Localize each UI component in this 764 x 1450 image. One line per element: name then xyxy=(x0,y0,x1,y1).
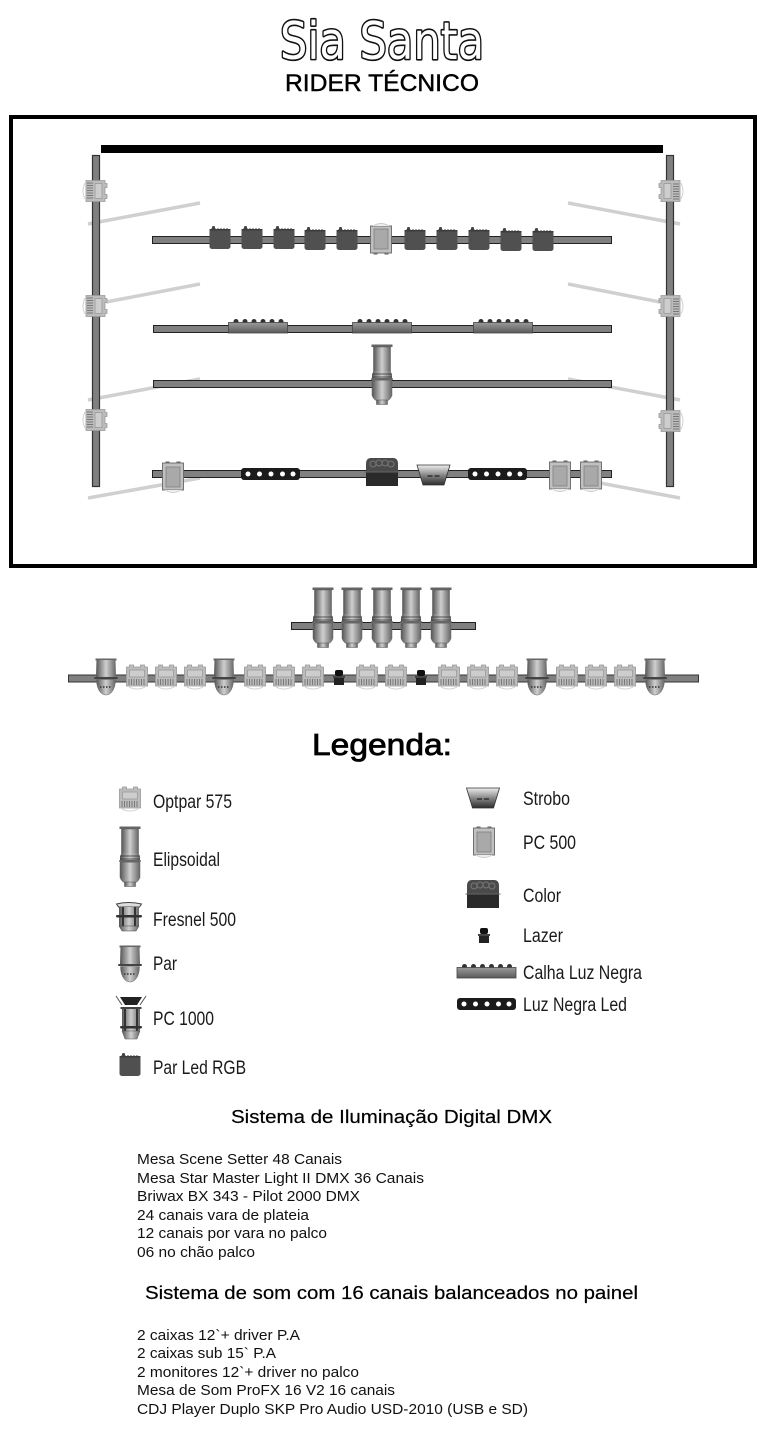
label: Luz Negra Led: Luz Negra Led xyxy=(523,995,627,1016)
label: Par: Par xyxy=(153,954,178,975)
legend heading: Legenda: xyxy=(312,727,452,762)
text block: sound equipment: 2 caixas sub 15` P.A xyxy=(137,1346,276,1362)
left side fixtures: Optpar xyxy=(83,180,107,430)
pipe 2 with Calha Luz Negra xyxy=(154,319,612,333)
text block: lighting equipment: 24 canais vara de plateia xyxy=(137,1208,310,1224)
icon: PC 1000 xyxy=(116,996,146,1039)
audience long pipe with mixed fixtures xyxy=(68,658,698,695)
logo: Sia Santa: Sia Santa xyxy=(280,12,484,72)
heading: lighting system: Sistema de Iluminação Digital DMX xyxy=(231,1107,552,1127)
icon: Color xyxy=(466,880,500,908)
icon: Luz Negra Led xyxy=(457,998,516,1010)
legend: left column xyxy=(116,787,246,1079)
text block: lighting equipment: 06 no chão palco xyxy=(137,1245,255,1261)
icon: Fresnel 500 xyxy=(116,902,142,931)
heading: sound system: Sistema de som com 16 canais balanceados no painel xyxy=(145,1283,638,1303)
icon: Par xyxy=(118,946,142,982)
text block: lighting equipment: Mesa Scene Setter 48 Canais xyxy=(137,1152,342,1168)
label: Calha Luz Negra: Calha Luz Negra xyxy=(523,963,642,984)
text block: lighting equipment: 12 canais por vara no palco xyxy=(137,1226,327,1242)
text block: sound equipment: 2 caixas 12`+ driver P.A xyxy=(137,1328,300,1344)
label: Lazer: Lazer xyxy=(523,926,564,947)
pipe 4 with mixed fixtures xyxy=(152,458,612,492)
pipe 1 with Par Led and PC 500 xyxy=(152,224,612,254)
label: Fresnel 500: Fresnel 500 xyxy=(153,910,236,931)
label: PC 1000: PC 1000 xyxy=(153,1009,214,1030)
legend: right column xyxy=(457,788,642,1016)
subtitle: Rider Técnico: RIDER TÉCNICO xyxy=(285,70,479,97)
label: Color: Color xyxy=(523,886,562,907)
stage frame xyxy=(11,117,755,566)
text block: sound equipment: 2 monitores 12`+ driver no palco xyxy=(137,1365,359,1381)
text block: sound equipment: CDJ Player Duplo SKP Pro Audio USD-2010 (USB e SD) xyxy=(137,1402,528,1418)
right side fixtures: Optpar xyxy=(659,180,683,432)
label: Optpar 575: Optpar 575 xyxy=(153,792,232,813)
icon: Strobo xyxy=(466,788,500,808)
pipe 3 with Elipsoidal xyxy=(154,344,612,404)
text block: sound equipment xyxy=(137,1328,528,1418)
label: Par Led RGB: Par Led RGB xyxy=(153,1058,246,1079)
back curtain bar xyxy=(101,145,663,153)
text block: lighting equipment: Briwax BX 343 - Pilot 2000 DMX xyxy=(137,1189,360,1205)
label: PC 500: PC 500 xyxy=(523,833,576,854)
icon: Elipsoidal xyxy=(119,826,141,886)
icon: Calha Luz Negra xyxy=(457,964,516,978)
icon: PC 500 xyxy=(474,827,494,858)
text block: lighting equipment: Mesa Star Master Light II DMX 36 Canais xyxy=(137,1171,424,1187)
icon: Optpar 575 xyxy=(120,787,140,811)
text block: sound equipment: Mesa de Som ProFX 16 V2 16 canais xyxy=(137,1383,395,1399)
icon: Lazer xyxy=(478,928,490,943)
icon: Par Led RGB xyxy=(120,1053,140,1076)
side pipes xyxy=(92,156,674,486)
audience pipe with Elipsoidal xyxy=(292,588,476,648)
label: Strobo: Strobo xyxy=(523,789,570,810)
label: Elipsoidal: Elipsoidal xyxy=(153,850,220,871)
panel: stage plan xyxy=(11,117,755,566)
text block: lighting equipment xyxy=(137,1152,424,1261)
light beams xyxy=(88,203,680,498)
